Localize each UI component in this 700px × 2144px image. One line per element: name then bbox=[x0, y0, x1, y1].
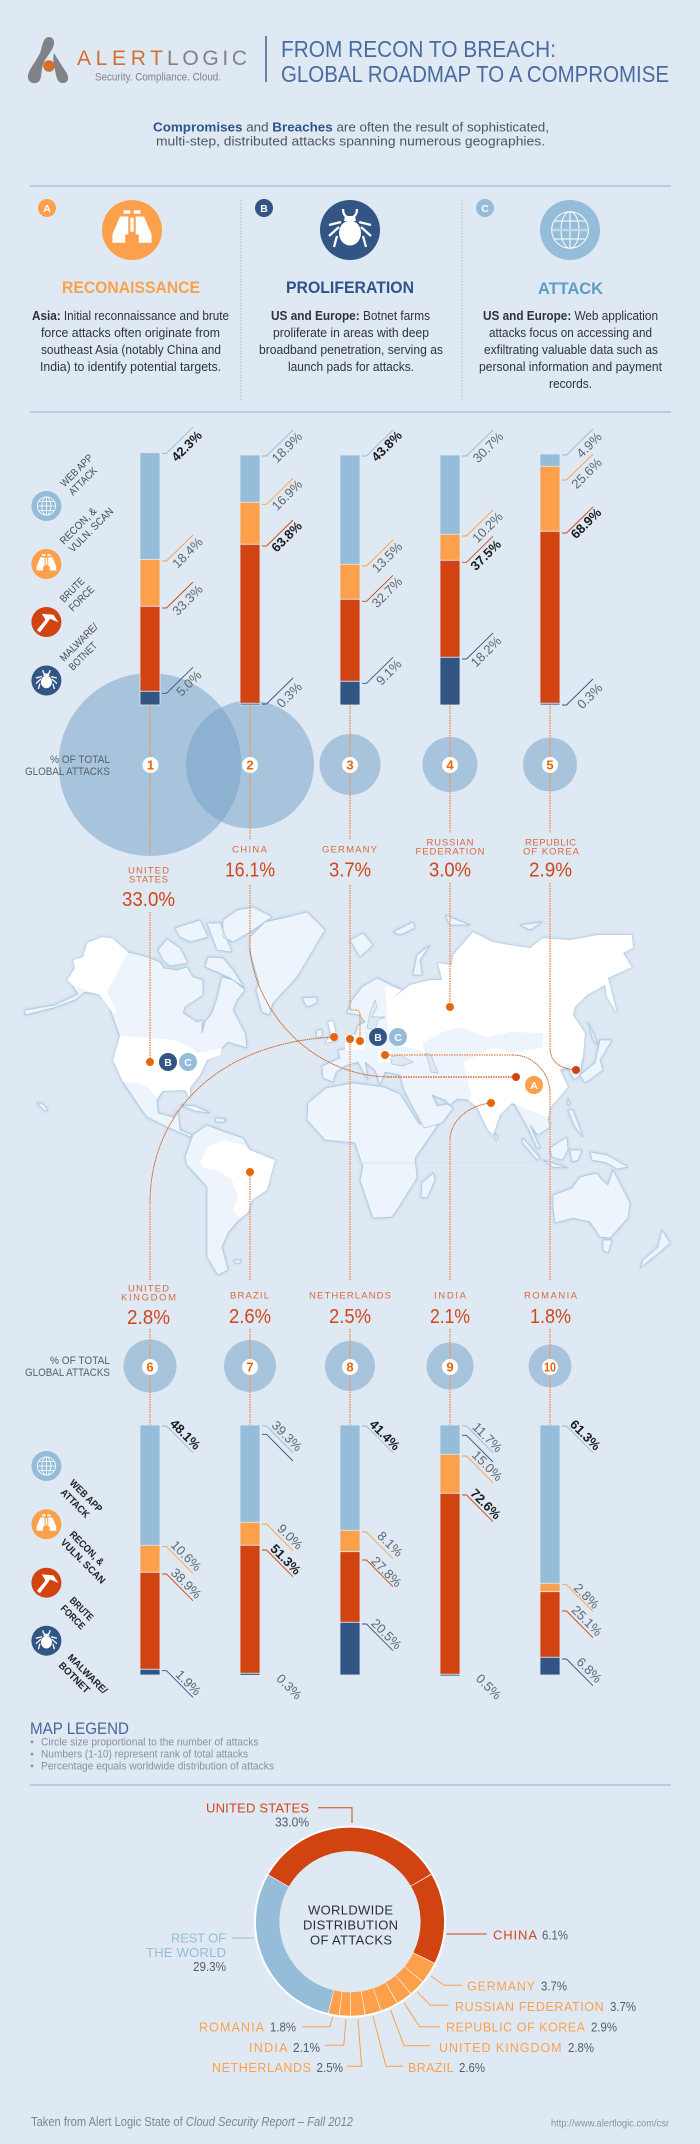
country labels bottom: KINGDOM bbox=[121, 1292, 176, 1304]
top bar percentages: 10.2% bbox=[469, 509, 506, 546]
Southeast Asia and Oceania bbox=[522, 1110, 670, 1268]
logo: Alert Logic: LOGIC bbox=[167, 47, 247, 70]
bottom bar percentages bbox=[167, 1416, 606, 1703]
donut labels: NETHERLANDS bbox=[212, 2061, 311, 2075]
top bar percentages: 5.0% bbox=[173, 667, 205, 699]
map legend bbox=[30, 1720, 274, 1772]
donut labels: 2.1% bbox=[293, 2041, 320, 2055]
South America bbox=[185, 1125, 275, 1275]
rank pills 6 to 10: 6 bbox=[146, 1360, 154, 1375]
Arctic islands and Greenland bbox=[37, 907, 325, 1122]
body text: proliferate in areas with deep bbox=[273, 326, 429, 340]
panel: reconnaissance bbox=[32, 199, 229, 374]
country labels top: 3.0% bbox=[429, 860, 471, 882]
bottom bar percentages: 48.1% bbox=[167, 1416, 204, 1453]
panel: attack bbox=[476, 199, 662, 391]
bottom bar percentages: 0.5% bbox=[473, 1671, 505, 1703]
bar: Brazil bbox=[240, 1425, 260, 1675]
donut labels: THE WORLD bbox=[146, 1945, 226, 1960]
rotated legend labels: VULN. SCAN bbox=[58, 1537, 107, 1586]
country labels top: 3.7% bbox=[329, 860, 371, 882]
badge A: A bbox=[43, 203, 51, 215]
body text: India) to identify potential targets. bbox=[40, 360, 221, 374]
title bbox=[266, 36, 669, 87]
rotated legend labels bbox=[56, 1478, 109, 1697]
bar: United States bbox=[140, 453, 160, 705]
donut labels: UNITED STATES bbox=[206, 1800, 309, 1816]
rotated legend labels: RECON, & bbox=[67, 1529, 106, 1568]
country labels top: FEDERATION bbox=[416, 846, 485, 858]
country labels bottom: 2.5% bbox=[329, 1306, 371, 1328]
donut leader lines bbox=[232, 1808, 487, 2066]
icon: recon bbox=[31, 1509, 61, 1539]
body text: force attacks often originate from bbox=[41, 326, 220, 340]
bar: Germany bbox=[340, 455, 360, 705]
rank pills 6 to 10 bbox=[142, 1359, 558, 1375]
map legend: MAP LEGEND bbox=[30, 1720, 129, 1738]
country labels top bbox=[122, 838, 580, 911]
country labels bottom: 1.8% bbox=[530, 1306, 571, 1328]
donut labels: 1.8% bbox=[270, 2020, 296, 2034]
top bar percentages: 18.9% bbox=[269, 429, 306, 466]
badge B: B bbox=[260, 203, 268, 215]
bottom bar percentages: 2.8% bbox=[571, 1580, 603, 1612]
country connector lines bbox=[150, 705, 576, 1425]
country labels bottom bbox=[121, 1284, 578, 1329]
icon: hammer bbox=[31, 607, 61, 637]
top bar percentages: 68.9% bbox=[568, 505, 605, 542]
top bar percentages: 0.3% bbox=[574, 680, 606, 712]
donut labels: 2.6% bbox=[459, 2061, 485, 2075]
label: % of total bottom: GLOBAL ATTACKS bbox=[25, 1367, 110, 1379]
map badges bbox=[159, 1028, 543, 1094]
country labels bottom: 2.1% bbox=[430, 1306, 470, 1328]
country labels bottom: UNITED bbox=[128, 1284, 169, 1294]
bar: United Kingdom bbox=[140, 1425, 160, 1675]
top bar percentages: 42.3% bbox=[168, 427, 205, 464]
logo: Alert Logic bbox=[28, 37, 247, 84]
body text: southeast Asia (notably China and bbox=[41, 343, 221, 357]
donut labels: 3.7% bbox=[541, 1980, 567, 1994]
bottom bar leader lines bbox=[162, 1426, 593, 1697]
label: % of total bottom bbox=[25, 1355, 110, 1379]
intro text: multi-step, distributed attacks spanning numerous geographies. bbox=[156, 134, 545, 148]
rank pills 1 to 5: 4 bbox=[446, 758, 454, 773]
rotated legend labels: WEB APP bbox=[58, 452, 96, 490]
donut labels: 2.9% bbox=[591, 2020, 617, 2034]
top bar percentages bbox=[168, 427, 606, 712]
badge A bbox=[38, 199, 56, 217]
rotated legend labels: FORCE bbox=[58, 1603, 87, 1633]
country labels top: STATES bbox=[129, 874, 168, 886]
logo: Alert Logic: Security. Compliance. Cloud. bbox=[95, 72, 221, 84]
bar: Netherlands bbox=[340, 1425, 360, 1675]
intro text: Compromises and Breaches are often the result of sophisticated, bbox=[153, 120, 549, 134]
body text: launch pads for attacks. bbox=[288, 360, 414, 374]
country labels top: 2.9% bbox=[529, 860, 572, 882]
body text: exfiltrating valuable data such as bbox=[484, 343, 658, 357]
map location dots bbox=[146, 1003, 580, 1176]
donut title: DISTRIBUTION bbox=[303, 1918, 398, 1932]
rank pills 6 to 10: 8 bbox=[346, 1360, 354, 1375]
body text: personal information and payment bbox=[479, 360, 662, 374]
donut title: OF ATTACKS bbox=[310, 1932, 392, 1948]
donut labels: CHINA bbox=[493, 1928, 537, 1942]
country labels bottom: 2.6% bbox=[229, 1306, 271, 1328]
world map bbox=[25, 907, 670, 1275]
donut labels: RUSSIAN FEDERATION bbox=[455, 2000, 604, 2014]
rank pills 6 to 10: 9 bbox=[446, 1360, 454, 1375]
map badges: C bbox=[394, 1032, 402, 1044]
body text: attacks focus on accessing and bbox=[489, 326, 652, 340]
bottom bar percentages: 20.5% bbox=[368, 1616, 405, 1653]
donut labels: 33.0% bbox=[275, 1816, 309, 1830]
country labels top: CHINA bbox=[232, 844, 268, 856]
rotated legend labels: RECON, & bbox=[58, 505, 99, 547]
top bar percentages: 18.2% bbox=[468, 633, 505, 670]
label: % of total top bbox=[25, 754, 110, 778]
donut labels: 6.1% bbox=[542, 1928, 568, 1942]
footer url: http://www.alertlogic.com/csr bbox=[551, 2118, 670, 2130]
label: % of total top: GLOBAL ATTACKS bbox=[25, 766, 110, 778]
map legend: Numbers (1-10) represent rank of total attacks bbox=[41, 1748, 248, 1760]
icon: web app attack bbox=[31, 491, 61, 521]
rotated legend labels: WEB APP bbox=[67, 1478, 104, 1515]
icon: web app attack bbox=[31, 1451, 61, 1481]
map highlights: countries in white bbox=[67, 932, 633, 1218]
top bar percentages: 33.3% bbox=[169, 581, 206, 618]
title: FROM RECON TO BREACH: bbox=[281, 36, 556, 62]
rotated legend labels: BOTNET bbox=[56, 1660, 92, 1696]
country labels bottom: BRAZIL bbox=[230, 1290, 269, 1302]
rotated legend labels: BRUTE bbox=[58, 575, 87, 605]
bar: India bbox=[440, 1425, 460, 1676]
top bar percentages: 43.8% bbox=[368, 427, 405, 464]
country labels top: 33.0% bbox=[122, 889, 175, 911]
top bar leader lines bbox=[162, 427, 593, 705]
label: % of total bottom: % OF TOTAL bbox=[50, 1355, 110, 1367]
donut labels: BRAZIL bbox=[408, 2061, 454, 2075]
country labels top: UNITED bbox=[128, 866, 169, 876]
bar: Republic of Korea bbox=[540, 454, 560, 705]
bottom bar percentages: 72.6% bbox=[467, 1486, 504, 1523]
map badges: A bbox=[530, 1080, 538, 1092]
rotated legend labels: ATTACK bbox=[58, 1487, 92, 1521]
top bar percentages: 30.7% bbox=[470, 429, 507, 466]
bar: Romania bbox=[540, 1425, 560, 1675]
map legend: Circle size proportional to the number of attacks bbox=[41, 1736, 259, 1748]
rank pills 1 to 5: 3 bbox=[346, 758, 354, 773]
label: % of total top: % OF TOTAL bbox=[50, 754, 110, 766]
bottom stacked bars bbox=[140, 1425, 560, 1676]
rotated legend labels bbox=[58, 452, 116, 673]
bottom bar percentages: 9.0% bbox=[274, 1521, 306, 1553]
donut labels: 29.3% bbox=[193, 1960, 226, 1974]
bottom bar percentages: 27.8% bbox=[368, 1553, 405, 1590]
donut labels: 2.5% bbox=[316, 2061, 343, 2075]
top bar percentages: 37.5% bbox=[467, 536, 504, 573]
bottom bar percentages: 38.9% bbox=[168, 1565, 205, 1602]
icon: globe bbox=[540, 200, 600, 260]
body text bbox=[32, 309, 229, 374]
top stacked bars bbox=[140, 453, 560, 705]
bottom legend bbox=[31, 1451, 109, 1697]
body text bbox=[479, 309, 662, 391]
body text bbox=[259, 309, 443, 374]
badge B bbox=[255, 199, 273, 217]
bottom bar percentages: 15.0% bbox=[469, 1447, 506, 1484]
rotated legend labels: ATTACK bbox=[67, 465, 100, 498]
top bar percentages: 18.4% bbox=[169, 534, 206, 571]
top bar percentages: 0.3% bbox=[274, 679, 305, 711]
donut title bbox=[303, 1902, 398, 1948]
rotated legend labels: BOTNET bbox=[67, 640, 100, 673]
bottom bar percentages: 25.1% bbox=[569, 1602, 606, 1639]
bottom bar percentages: 8.1% bbox=[374, 1528, 406, 1560]
North America bbox=[25, 937, 247, 1137]
top bar percentages: 13.5% bbox=[369, 539, 406, 576]
rank pills 1 to 5: 1 bbox=[147, 758, 154, 773]
donut labels: 2.8% bbox=[568, 2041, 594, 2055]
rotated legend labels: FORCE bbox=[67, 584, 97, 614]
Eurasian islands bbox=[316, 915, 612, 1140]
badge C: C bbox=[481, 203, 489, 215]
heading: RECONAISSANCE bbox=[62, 278, 200, 297]
icon: recon bbox=[31, 549, 61, 579]
rotated legend labels: VULN. SCAN bbox=[67, 506, 116, 555]
heading: ATTACK bbox=[538, 279, 603, 298]
footer source: Taken from Alert Logic State of Cloud Security Report – Fall 2012 bbox=[31, 2114, 354, 2129]
country labels top: 16.1% bbox=[225, 860, 275, 882]
rotated legend labels: BRUTE bbox=[67, 1595, 95, 1624]
bottom bar percentages: 61.3% bbox=[567, 1417, 604, 1454]
map badges: C bbox=[184, 1057, 192, 1069]
donut labels bbox=[146, 1800, 636, 2075]
bar: China bbox=[240, 455, 260, 705]
top legend bbox=[31, 452, 116, 696]
rank pills 1 to 5 bbox=[142, 757, 558, 773]
rotated legend labels: MALWARE/ bbox=[58, 621, 101, 664]
bottom bar percentages: 1.9% bbox=[173, 1667, 204, 1699]
body text: US and Europe: Botnet farms bbox=[271, 309, 430, 323]
country labels top: OF KOREA bbox=[523, 846, 580, 858]
icon: binoculars bbox=[102, 200, 162, 260]
body text: records. bbox=[549, 377, 592, 391]
heading: PROLIFERATION bbox=[286, 278, 414, 297]
body text: US and Europe: Web application bbox=[483, 309, 658, 323]
rank pills 1 to 5: 5 bbox=[546, 758, 554, 773]
top bar percentages: 4.9% bbox=[573, 429, 605, 461]
donut title: WORLDWIDE bbox=[308, 1902, 393, 1918]
top bar percentages: 25.6% bbox=[568, 455, 605, 492]
icon: hammer bbox=[31, 1568, 61, 1598]
donut labels: INDIA bbox=[249, 2041, 288, 2055]
rank pills 6 to 10: 10 bbox=[544, 1360, 556, 1375]
Eurasia bbox=[322, 932, 633, 1148]
country labels top: GERMANY bbox=[322, 844, 378, 856]
donut labels: REST OF bbox=[171, 1930, 226, 1946]
bottom bar percentages: 39.3% bbox=[269, 1418, 306, 1455]
logo: Alert Logic: ALERT bbox=[77, 47, 163, 70]
country labels bottom: NETHERLANDS bbox=[309, 1290, 391, 1302]
icon: bug bbox=[320, 200, 380, 260]
top bar percentages: 9.1% bbox=[373, 656, 405, 688]
bar: Russian Federation bbox=[440, 455, 460, 705]
donut labels: GERMANY bbox=[467, 1980, 536, 1994]
donut labels: ROMANIA bbox=[199, 2020, 265, 2034]
rank pills 6 to 10: 7 bbox=[246, 1360, 254, 1375]
inland seas bbox=[367, 1000, 438, 1073]
top bar percentages: 32.7% bbox=[369, 574, 406, 611]
top bar percentages: 63.8% bbox=[268, 518, 305, 555]
country labels top: REPUBLIC bbox=[525, 838, 576, 848]
bottom bar percentages: 6.8% bbox=[574, 1654, 605, 1686]
bottom bar percentages: 51.3% bbox=[267, 1541, 304, 1578]
country labels bottom: ROMANIA bbox=[524, 1290, 578, 1302]
bottom bar percentages: 41.4% bbox=[366, 1417, 403, 1454]
country labels bottom: INDIA bbox=[434, 1290, 467, 1302]
country labels bottom: 2.8% bbox=[127, 1307, 170, 1329]
bottom bar percentages: 10.6% bbox=[168, 1537, 205, 1574]
top circles: share of global attacks bbox=[58, 673, 577, 856]
donut labels: REPUBLIC OF KOREA bbox=[446, 2020, 586, 2034]
map badges: B bbox=[164, 1057, 172, 1069]
country labels top: RUSSIAN bbox=[426, 838, 474, 848]
intro text bbox=[153, 120, 549, 148]
bottom bar percentages: 0.3% bbox=[274, 1671, 305, 1703]
map legend: Percentage equals worldwide distribution of attacks bbox=[41, 1760, 274, 1772]
top bar percentages: 16.9% bbox=[269, 476, 306, 513]
donut chart bbox=[234, 1806, 466, 2038]
donut labels: UNITED KINGDOM bbox=[439, 2041, 562, 2055]
donut labels: 3.7% bbox=[610, 2000, 636, 2014]
rotated legend labels: MALWARE/ bbox=[65, 1652, 109, 1697]
bottom bar percentages: 11.7% bbox=[470, 1419, 506, 1456]
bottom circles: share of global attacks bbox=[124, 1340, 572, 1392]
Africa bbox=[307, 1083, 438, 1218]
map badges: B bbox=[374, 1032, 382, 1044]
icon: malware bbox=[31, 1626, 61, 1656]
body text: Asia: Initial reconnaissance and brute bbox=[32, 309, 229, 323]
icon: malware bbox=[31, 666, 61, 696]
panel: proliferation bbox=[255, 199, 443, 374]
badge C bbox=[476, 199, 494, 217]
rank pills 1 to 5: 2 bbox=[246, 758, 254, 773]
body text: broadband penetration, serving as bbox=[259, 343, 443, 357]
